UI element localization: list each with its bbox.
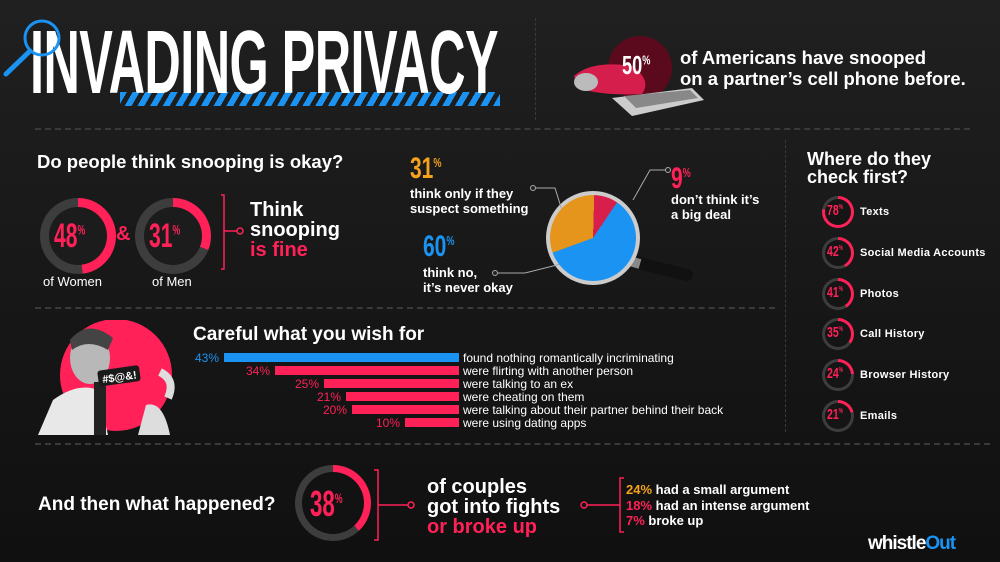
illustration: angry man on phone	[38, 320, 175, 435]
panel: snooping okay	[37, 151, 343, 289]
bracket connector	[221, 194, 244, 270]
donut: men 31%	[135, 198, 211, 274]
bar chart: careful what you wish for: were talking about their partner behind their back	[462, 403, 724, 417]
donut list: Browser History	[860, 369, 949, 381]
icon: hand with phone	[574, 36, 704, 116]
bar chart: careful what you wish for: were cheating on them	[462, 390, 584, 404]
chart: pie in magnifier: it’s never okay	[423, 280, 513, 295]
stripes	[120, 92, 500, 106]
donut: 38%: 38%	[310, 483, 343, 524]
panel: then what happened: 18% had an intense argument	[626, 498, 810, 512]
donut list: 21%	[827, 406, 843, 423]
logo: whistleOut	[868, 533, 955, 554]
bar chart: careful what you wish for: found nothing romantically incriminating	[463, 351, 674, 365]
donut: men 31%: 31%	[149, 217, 180, 255]
panel: snooping okay: of Men	[152, 274, 192, 289]
chart: pie in magnifier: 60%	[423, 230, 454, 263]
panel: snooping okay: of Women	[43, 274, 102, 289]
chart: pie in magnifier: think only if they	[410, 186, 513, 201]
bar chart: careful what you wish for: 21%	[317, 390, 341, 404]
title: INVADING PRIVACY	[30, 13, 498, 113]
bar chart: careful what you wish for	[193, 324, 724, 430]
stat: 50% snooped: on a partner’s cell phone before.	[680, 68, 966, 89]
donut list: 35%	[827, 324, 843, 341]
bar chart: careful what you wish for: Careful what you wish for	[193, 324, 424, 345]
icon: magnifier	[4, 20, 60, 76]
bar chart: careful what you wish for: were using dating apps	[462, 416, 586, 430]
chart: pie in magnifier	[410, 152, 759, 295]
chart: pie in magnifier: 9%	[671, 162, 691, 195]
panel: then what happened: 7% broke up	[626, 513, 703, 528]
donut list: Social Media Accounts	[860, 247, 986, 259]
connector	[374, 469, 624, 541]
panel: snooping okay: &	[116, 223, 130, 245]
chart: pie in magnifier: 31%	[410, 152, 441, 185]
chart: pie in magnifier: a big deal	[671, 207, 731, 222]
donut list: 24%	[827, 365, 843, 382]
bar chart: careful what you wish for: 25%	[295, 377, 319, 391]
panel: where do they check first: Where do they	[807, 149, 931, 169]
panel: where do they check first: check first?	[807, 167, 908, 187]
bar chart: careful what you wish for: 34%	[246, 364, 270, 378]
panel: then what happened: And then what happened?	[38, 494, 276, 515]
donut list: 42%	[827, 243, 843, 260]
panel: then what happened: 24% had a small argument	[626, 482, 789, 497]
panel: where do they check first	[807, 149, 986, 432]
chart: pie in magnifier: don’t think it’s	[671, 192, 759, 207]
illustration: angry man on phone: #$@&!	[102, 369, 138, 386]
heading: Do people think snooping is okay?	[37, 151, 343, 172]
stat: 50% snooped: 50%	[622, 50, 650, 80]
donut: women 48%	[40, 198, 116, 274]
donut list	[822, 196, 986, 432]
donut list: Photos	[860, 288, 899, 300]
bar chart: careful what you wish for: 43%	[195, 351, 219, 365]
chart: pie in magnifier: suspect something	[410, 201, 528, 216]
panel: then what happened: or broke up	[427, 516, 537, 538]
panel: snooping okay: snooping	[250, 219, 340, 241]
bar chart: careful what you wish for: were flirting with another person	[462, 364, 633, 378]
chart: pie in magnifier: think no,	[423, 265, 477, 280]
stat: 50% snooped	[574, 36, 966, 116]
panel: snooping okay: Think	[250, 199, 303, 221]
donut list: Emails	[860, 410, 897, 422]
donut: women 48%: 48%	[54, 217, 85, 255]
donut list: Call History	[860, 328, 925, 340]
panel: then what happened	[38, 465, 810, 541]
stat: 50% snooped: of Americans have snooped	[680, 47, 926, 68]
donut list: 78%	[827, 202, 843, 219]
donut: 38%	[295, 465, 371, 541]
donut list: Texts	[860, 206, 889, 218]
bar chart: careful what you wish for: 10%	[376, 416, 400, 430]
panel: then what happened: of couples	[427, 476, 527, 498]
bar chart: careful what you wish for: were talking to an ex	[462, 377, 573, 391]
panel: then what happened: got into fights	[427, 496, 560, 518]
panel: snooping okay: is fine	[250, 239, 308, 261]
bar chart: careful what you wish for: 20%	[323, 403, 347, 417]
donut list: 41%	[827, 284, 843, 301]
